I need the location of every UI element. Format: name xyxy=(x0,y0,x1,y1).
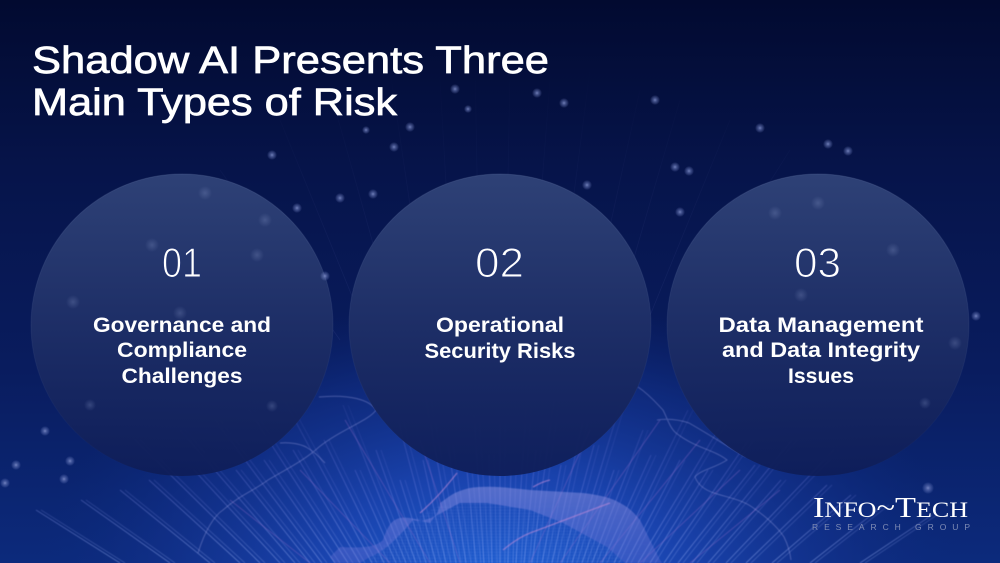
label: operational security risks xyxy=(424,314,576,363)
panel: data management xyxy=(718,239,924,388)
circle: 02 backdrop xyxy=(349,174,651,476)
wave mesh sculpture xyxy=(330,473,662,563)
label: operational security risks: Operational xyxy=(436,314,564,337)
number 01: 01 xyxy=(162,239,202,286)
faint particles inside circles xyxy=(66,186,962,412)
number 03: 03 xyxy=(794,239,841,286)
label: governance and compliance challenges: Compliance xyxy=(117,339,247,362)
purple fan accents xyxy=(230,420,780,563)
label: data management and data integrity issues: Issues xyxy=(788,365,854,388)
bottom glow xyxy=(0,250,1000,563)
logo: Info-Tech Research Group: INFO ~T ECH xyxy=(813,492,968,524)
label: data management and data integrity issues: and Data Integrity xyxy=(722,339,920,362)
panel: operational security xyxy=(424,239,576,363)
label: data management and data integrity issues xyxy=(718,314,924,388)
title: Shadow AI Presents Three xyxy=(32,40,549,82)
circle: 03 backdrop xyxy=(667,174,969,476)
title xyxy=(32,40,549,124)
label: data management and data integrity issues: Data Management xyxy=(718,314,924,337)
panel: governance and compliance xyxy=(93,239,271,388)
label: governance and compliance challenges: Governance and xyxy=(93,314,271,337)
label: governance and compliance challenges: Challenges xyxy=(122,365,242,388)
label: operational security risks: Security Risks xyxy=(424,340,576,363)
glowing particles xyxy=(0,84,981,494)
wavy contour lines xyxy=(198,387,791,560)
circle: 01 backdrop xyxy=(31,174,333,476)
faint upper rays xyxy=(220,60,790,340)
title: Main Types of Risk xyxy=(32,82,398,124)
label: governance and compliance challenges xyxy=(93,314,271,388)
logo: Info-Tech Research Group: RESEARCH GROUP xyxy=(812,522,970,532)
radial line fan xyxy=(36,400,937,563)
number 02: 02 xyxy=(475,239,524,286)
